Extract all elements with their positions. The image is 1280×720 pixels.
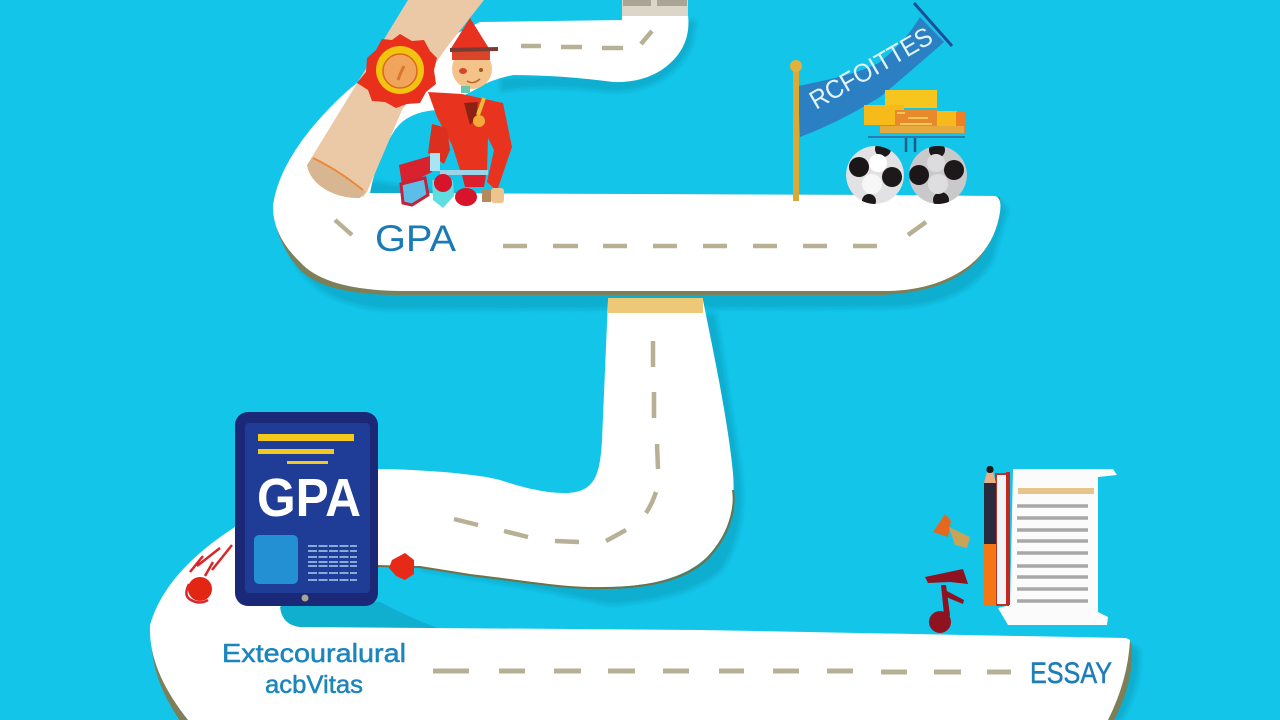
tablet: yellow heading lines bbox=[258, 434, 354, 464]
icon: notebook spine bbox=[996, 472, 1010, 605]
road dashes: bottom bbox=[433, 671, 1011, 672]
figure: cups and items bbox=[399, 153, 504, 208]
label: extracurricular activities: acbVitas bbox=[265, 671, 363, 699]
icon: soccer ball left bbox=[846, 146, 904, 204]
label: extracurricular activities bbox=[222, 638, 406, 699]
figure: head bbox=[452, 49, 492, 93]
label: extracurricular activities: Extecouralural bbox=[222, 638, 406, 668]
road dashes: top and main bbox=[335, 31, 926, 246]
tablet: text lines bbox=[308, 546, 357, 580]
icon: yellow vehicle bbox=[864, 90, 965, 152]
label: GPA on road: GPA bbox=[375, 218, 456, 259]
tablet: blue image block bbox=[254, 535, 298, 584]
icon: essay paper bbox=[998, 469, 1117, 625]
icon: red comet bbox=[186, 545, 232, 602]
road dashes: middle bend bbox=[454, 341, 658, 542]
tablet: GPA title: GPA bbox=[257, 468, 361, 528]
tablet: home button bbox=[302, 594, 308, 602]
road end: grey strip bbox=[622, 0, 688, 16]
icon: soccer ball right bbox=[909, 146, 967, 204]
icon: music note bbox=[925, 569, 968, 633]
icon: orange fragment bbox=[933, 514, 970, 548]
banner: flag with pole bbox=[790, 3, 952, 201]
icon: diploma scroll bbox=[307, 0, 484, 198]
icon: red apple bbox=[389, 553, 414, 580]
road: upper section bbox=[273, 0, 1008, 310]
icon: pencil bbox=[984, 466, 996, 606]
figure: person in red bbox=[399, 18, 512, 208]
icon: award seal bbox=[357, 34, 437, 108]
figure: hat bbox=[450, 18, 498, 60]
tablet bbox=[235, 412, 378, 606]
road: lower section bbox=[150, 298, 1140, 720]
banner label: RCFOITTES bbox=[804, 21, 938, 115]
label: ESSAY: ESSAY bbox=[1030, 657, 1112, 690]
road connector: tan strip bbox=[608, 298, 703, 313]
figure: body bbox=[428, 92, 512, 191]
